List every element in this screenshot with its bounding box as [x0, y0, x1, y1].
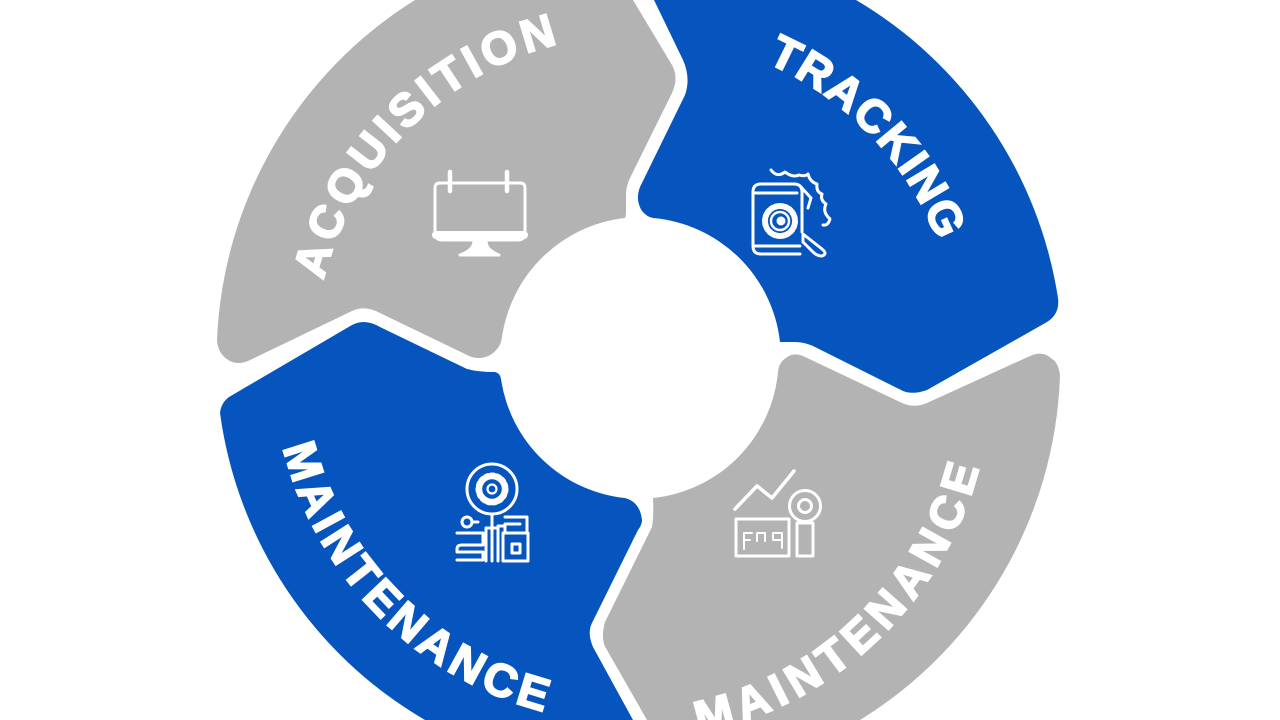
icon: monitor with calendar rings: [435, 172, 525, 255]
icon: gear in circle with machinery: [457, 464, 528, 561]
label: acquisition: ACQUISITION: [295, 13, 556, 281]
panel: maintenance segment, lower right: [602, 354, 1060, 720]
label: tracking: TRACKING: [774, 32, 964, 237]
label: maintenance, lower left: MAINTENANCE: [282, 440, 552, 712]
panel: acquisition segment: [217, 0, 676, 363]
icon: phone with gear and magnifier: [753, 170, 830, 256]
panel: tracking segment: [638, 0, 1058, 393]
panel: maintenance segment, lower left: [220, 322, 642, 720]
icon: chart with gauge: [735, 471, 820, 556]
